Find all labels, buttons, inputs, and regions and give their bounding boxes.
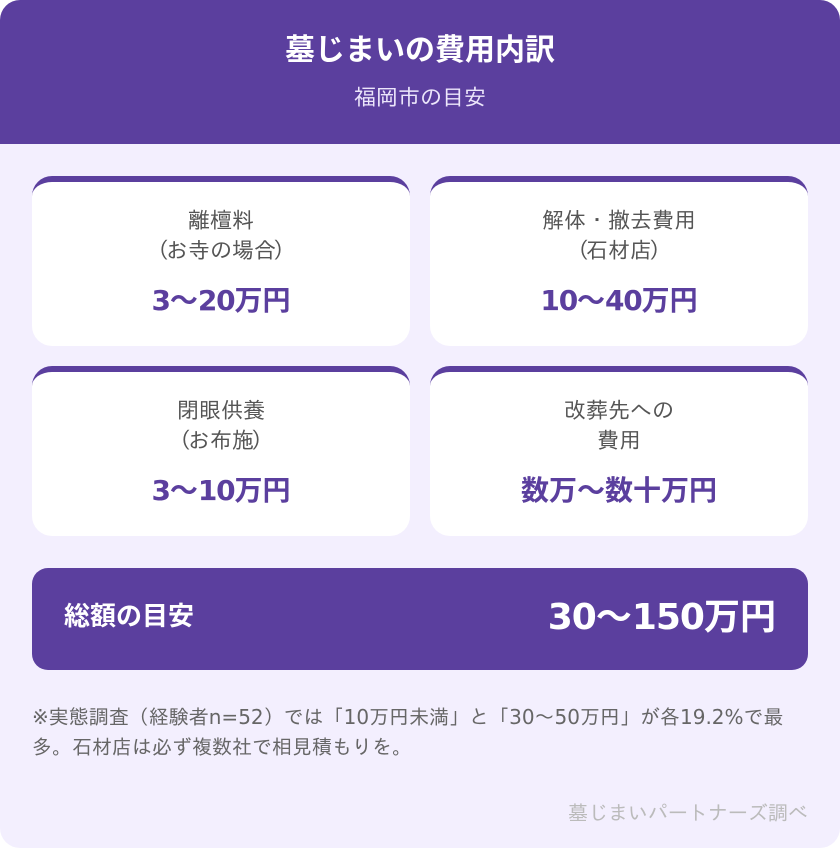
footnote: ※実態調査（経験者n=52）では「10万円未満」と「30〜50万円」が各19.2%で最多。石材店は必ず複数社で相見積もりを。 (32, 705, 784, 759)
header band (0, 0, 840, 144)
title: 墓じまいの費用内訳 (285, 25, 555, 69)
value: 10〜40万円: 10〜40万円 (540, 284, 698, 317)
value: 数万〜数十万円: 数万〜数十万円 (521, 474, 717, 507)
label: 解体・撤去費用: （石材店） (567, 239, 671, 264)
label: 改葬先への費用: 改葬先への (564, 399, 674, 424)
label: 離檀料 (147, 209, 295, 264)
label: 解体・撤去費用 (542, 209, 696, 264)
label: 閉眼供養: （お布施） (169, 429, 273, 454)
label: 離檀料: 離檀料 (188, 209, 254, 234)
value: 3〜10万円: 3〜10万円 (152, 474, 290, 507)
panel: total (32, 568, 808, 670)
value: 3〜20万円: 3〜20万円 (152, 284, 290, 317)
panel: 解体・撤去費用 (430, 176, 808, 346)
panel: 閉眼供養 (32, 366, 410, 536)
label: 離檀料: （お寺の場合） (147, 239, 295, 264)
label: 改葬先への費用: 費用 (597, 429, 641, 454)
panel: 改葬先への費用 (430, 366, 808, 536)
panel: 離檀料 (32, 176, 410, 346)
total value: 30〜150万円 (548, 597, 776, 638)
label: 改葬先への費用 (564, 399, 674, 454)
label: 閉眼供養: 閉眼供養 (177, 399, 265, 424)
subtitle: 福岡市の目安 (354, 86, 486, 111)
total label: 総額の目安 (64, 596, 194, 633)
source: 墓じまいパートナーズ調べ (568, 801, 808, 825)
label: 閉眼供養 (169, 399, 273, 454)
label: 解体・撤去費用: 解体・撤去費用 (542, 209, 696, 234)
